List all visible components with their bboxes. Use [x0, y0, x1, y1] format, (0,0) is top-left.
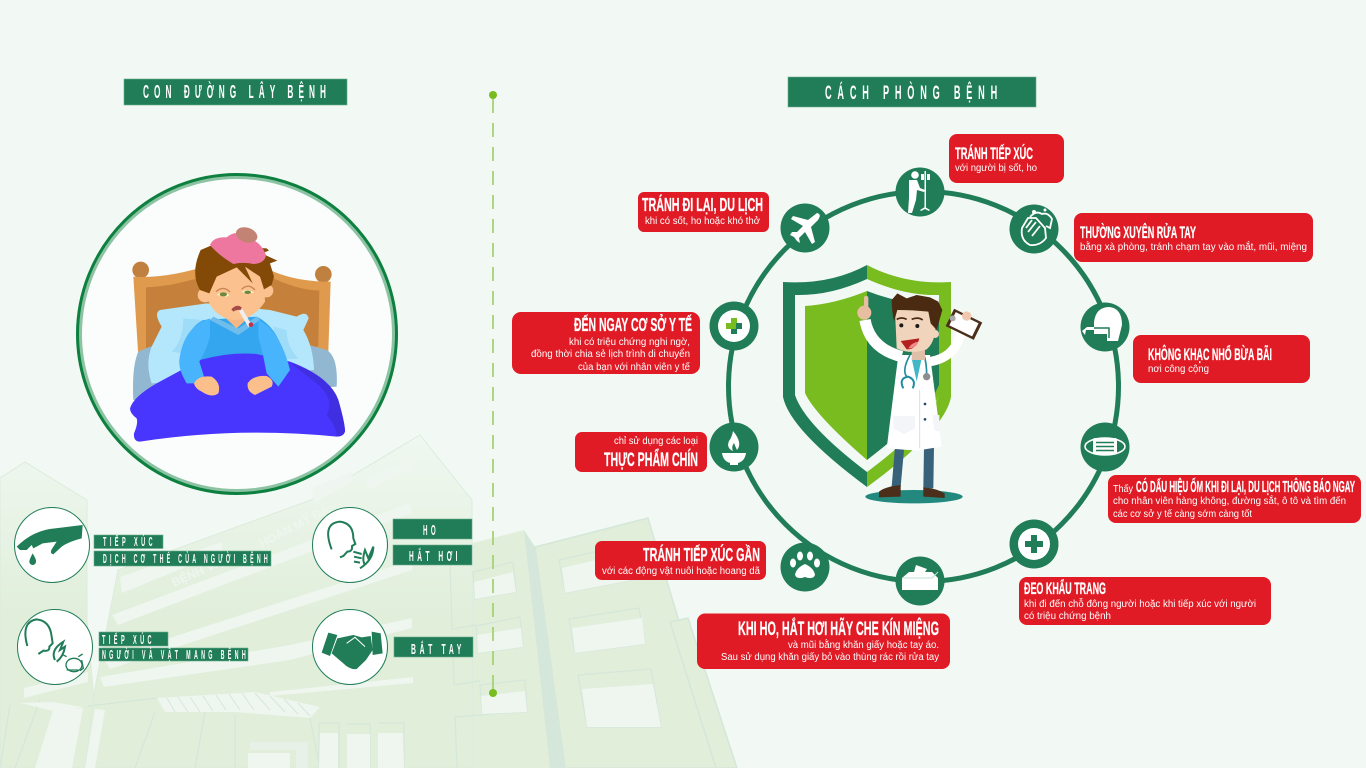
label: bắt tay	[394, 637, 473, 658]
label: tiếp xúc	[99, 632, 168, 647]
callout: thông báo khi có dấu hiệu ốm: Thấy	[1113, 483, 1133, 495]
callout: tránh đi lại, du lịch: khi có sốt, ho hoặc khó thở	[645, 215, 760, 227]
panel: transmission routes	[14, 508, 473, 684]
icon: medical mask	[1080, 422, 1130, 472]
panel: transmission routes: NGƯỜI VÀ VẬT MANG BỆNH	[102, 647, 249, 662]
background: hospital building	[0, 435, 737, 768]
callout: thường xuyên rửa tay: THƯỜNG XUYÊN RỬA TAY	[1080, 223, 1196, 242]
label: bắt tay: BẮT TAY	[411, 640, 465, 658]
label: dịch cơ thể của người bệnh	[94, 551, 271, 566]
callout: đeo khẩu trang: có triệu chứng bệnh	[1024, 611, 1111, 622]
divider line	[489, 91, 497, 697]
callout: thông báo khi có dấu hiệu ốm	[1108, 475, 1361, 523]
callout: thực phẩm chín: chỉ sử dụng các loại	[614, 435, 698, 447]
icon: handshake	[312, 610, 388, 684]
label: người và vật mang bệnh	[99, 647, 249, 662]
callout: không khạc nhổ bừa bãi	[1133, 335, 1310, 383]
callout: đến ngay cơ sở y tế	[512, 312, 700, 374]
callout: thực phẩm chín	[575, 432, 707, 472]
callout: tránh tiếp xúc gần: với các động vật nuôi hoặc hoang dã	[602, 566, 760, 577]
panel: transmission routes: DỊCH CƠ THỂ CỦA NGƯỜI BỆNH	[103, 551, 271, 566]
callout: đến ngay cơ sở y tế: của bạn với nhân viên y tế	[578, 361, 690, 373]
label: tiếp xúc: TIẾP XÚC	[102, 632, 155, 647]
label: hắt hơi: HẮT HƠI	[409, 547, 461, 565]
label: ho	[393, 519, 472, 539]
title: cách phòng bệnh: CÁCH PHÒNG BỆNH	[825, 82, 1003, 104]
callout: thông báo khi có dấu hiệu ốm: cho nhân viên hàng không, đường sắt, ô tô và tìm đến	[1113, 494, 1346, 507]
icon: plane	[780, 204, 830, 252]
label: tiếp xúc	[94, 534, 163, 549]
background: hospital building: BỆNH VIỆN	[169, 549, 235, 590]
callout: thực phẩm chín: THỰC PHẨM CHÍN	[604, 448, 698, 471]
icon: tissue box	[896, 556, 944, 606]
icon: patient with IV stand	[896, 168, 944, 216]
text: CON ĐƯỜNG LÂY BỆNH	[143, 81, 331, 102]
callout: tránh tiếp xúc	[949, 134, 1064, 183]
callout: che kín miệng: KHI HO, HẮT HƠI HÃY CHE KÍN MIỆNG	[738, 616, 939, 640]
callout: che kín miệng: và mũi bằng khăn giấy hoặc tay áo.	[788, 638, 939, 651]
callout: đến ngay cơ sở y tế: khi có triệu chứng nghi ngờ,	[569, 337, 690, 348]
callout: che kín miệng: Sau sử dụng khăn giấy bỏ vào thùng rác rồi rửa tay	[721, 651, 939, 663]
shield	[783, 265, 951, 487]
callout: đến ngay cơ sở y tế: ĐẾN NGAY CƠ SỞ Y TẾ	[574, 314, 692, 335]
callout: tránh tiếp xúc gần: TRÁNH TIẾP XÚC GẦN	[643, 544, 760, 565]
callout: đeo khẩu trang	[1019, 577, 1271, 625]
callout: đến ngay cơ sở y tế: đồng thời chia sẻ lịch trình di chuyển	[531, 348, 690, 360]
callout: tránh tiếp xúc: với người bị sốt, ho	[955, 162, 1037, 174]
callout: tránh tiếp xúc: TRÁNH TIẾP XÚC	[955, 144, 1033, 163]
callout: đeo khẩu trang: khi đi đến chỗ đông người hoặc khi tiếp xúc với người	[1024, 597, 1256, 610]
panel: transmission routes: TIẾP XÚC	[103, 534, 156, 549]
icon: flame and bowl	[710, 422, 758, 472]
icon: hand washing	[1010, 204, 1058, 254]
illustration: sick boy in bed	[78, 174, 396, 494]
background: hospital building: HOÀN MỸ ĐÀ	[256, 501, 332, 551]
callout: đeo khẩu trang: ĐEO KHẨU TRANG	[1024, 579, 1106, 598]
icon: cross in circle right	[1010, 520, 1058, 568]
title: cách phòng bệnh	[788, 77, 1036, 107]
icon: paw	[780, 542, 830, 592]
icon: no spitting head	[1080, 302, 1130, 352]
callout: không khạc nhổ bừa bãi: nơi công cộng	[1148, 364, 1209, 375]
icon: person and animal contact	[18, 610, 92, 684]
label: ho: HO	[423, 522, 439, 539]
ring connecting prevention icons	[728, 192, 1118, 582]
callout: tránh đi lại, du lịch: TRÁNH ĐI LẠI, DU LỊCH	[642, 194, 763, 215]
illustration: doctor	[857, 293, 982, 503]
callout: che kín miệng	[697, 614, 950, 669]
callout: thường xuyên rửa tay: bằng xà phòng, tránh chạm tay vào mắt, mũi, miệng	[1080, 240, 1307, 253]
icon: cross in circle left	[710, 302, 758, 350]
title: con đường lây bệnh	[124, 79, 347, 105]
callout: thường xuyên rửa tay	[1074, 213, 1313, 262]
label: hắt hơi	[393, 545, 472, 565]
callout: tránh đi lại, du lịch	[638, 192, 769, 232]
icon: hand with body fluid	[14, 508, 90, 582]
callout: tránh tiếp xúc gần	[595, 541, 766, 580]
callout: thông báo khi có dấu hiệu ốm: các cơ sở y tế càng sớm càng tốt	[1113, 508, 1252, 520]
icon: coughing head	[312, 508, 388, 582]
